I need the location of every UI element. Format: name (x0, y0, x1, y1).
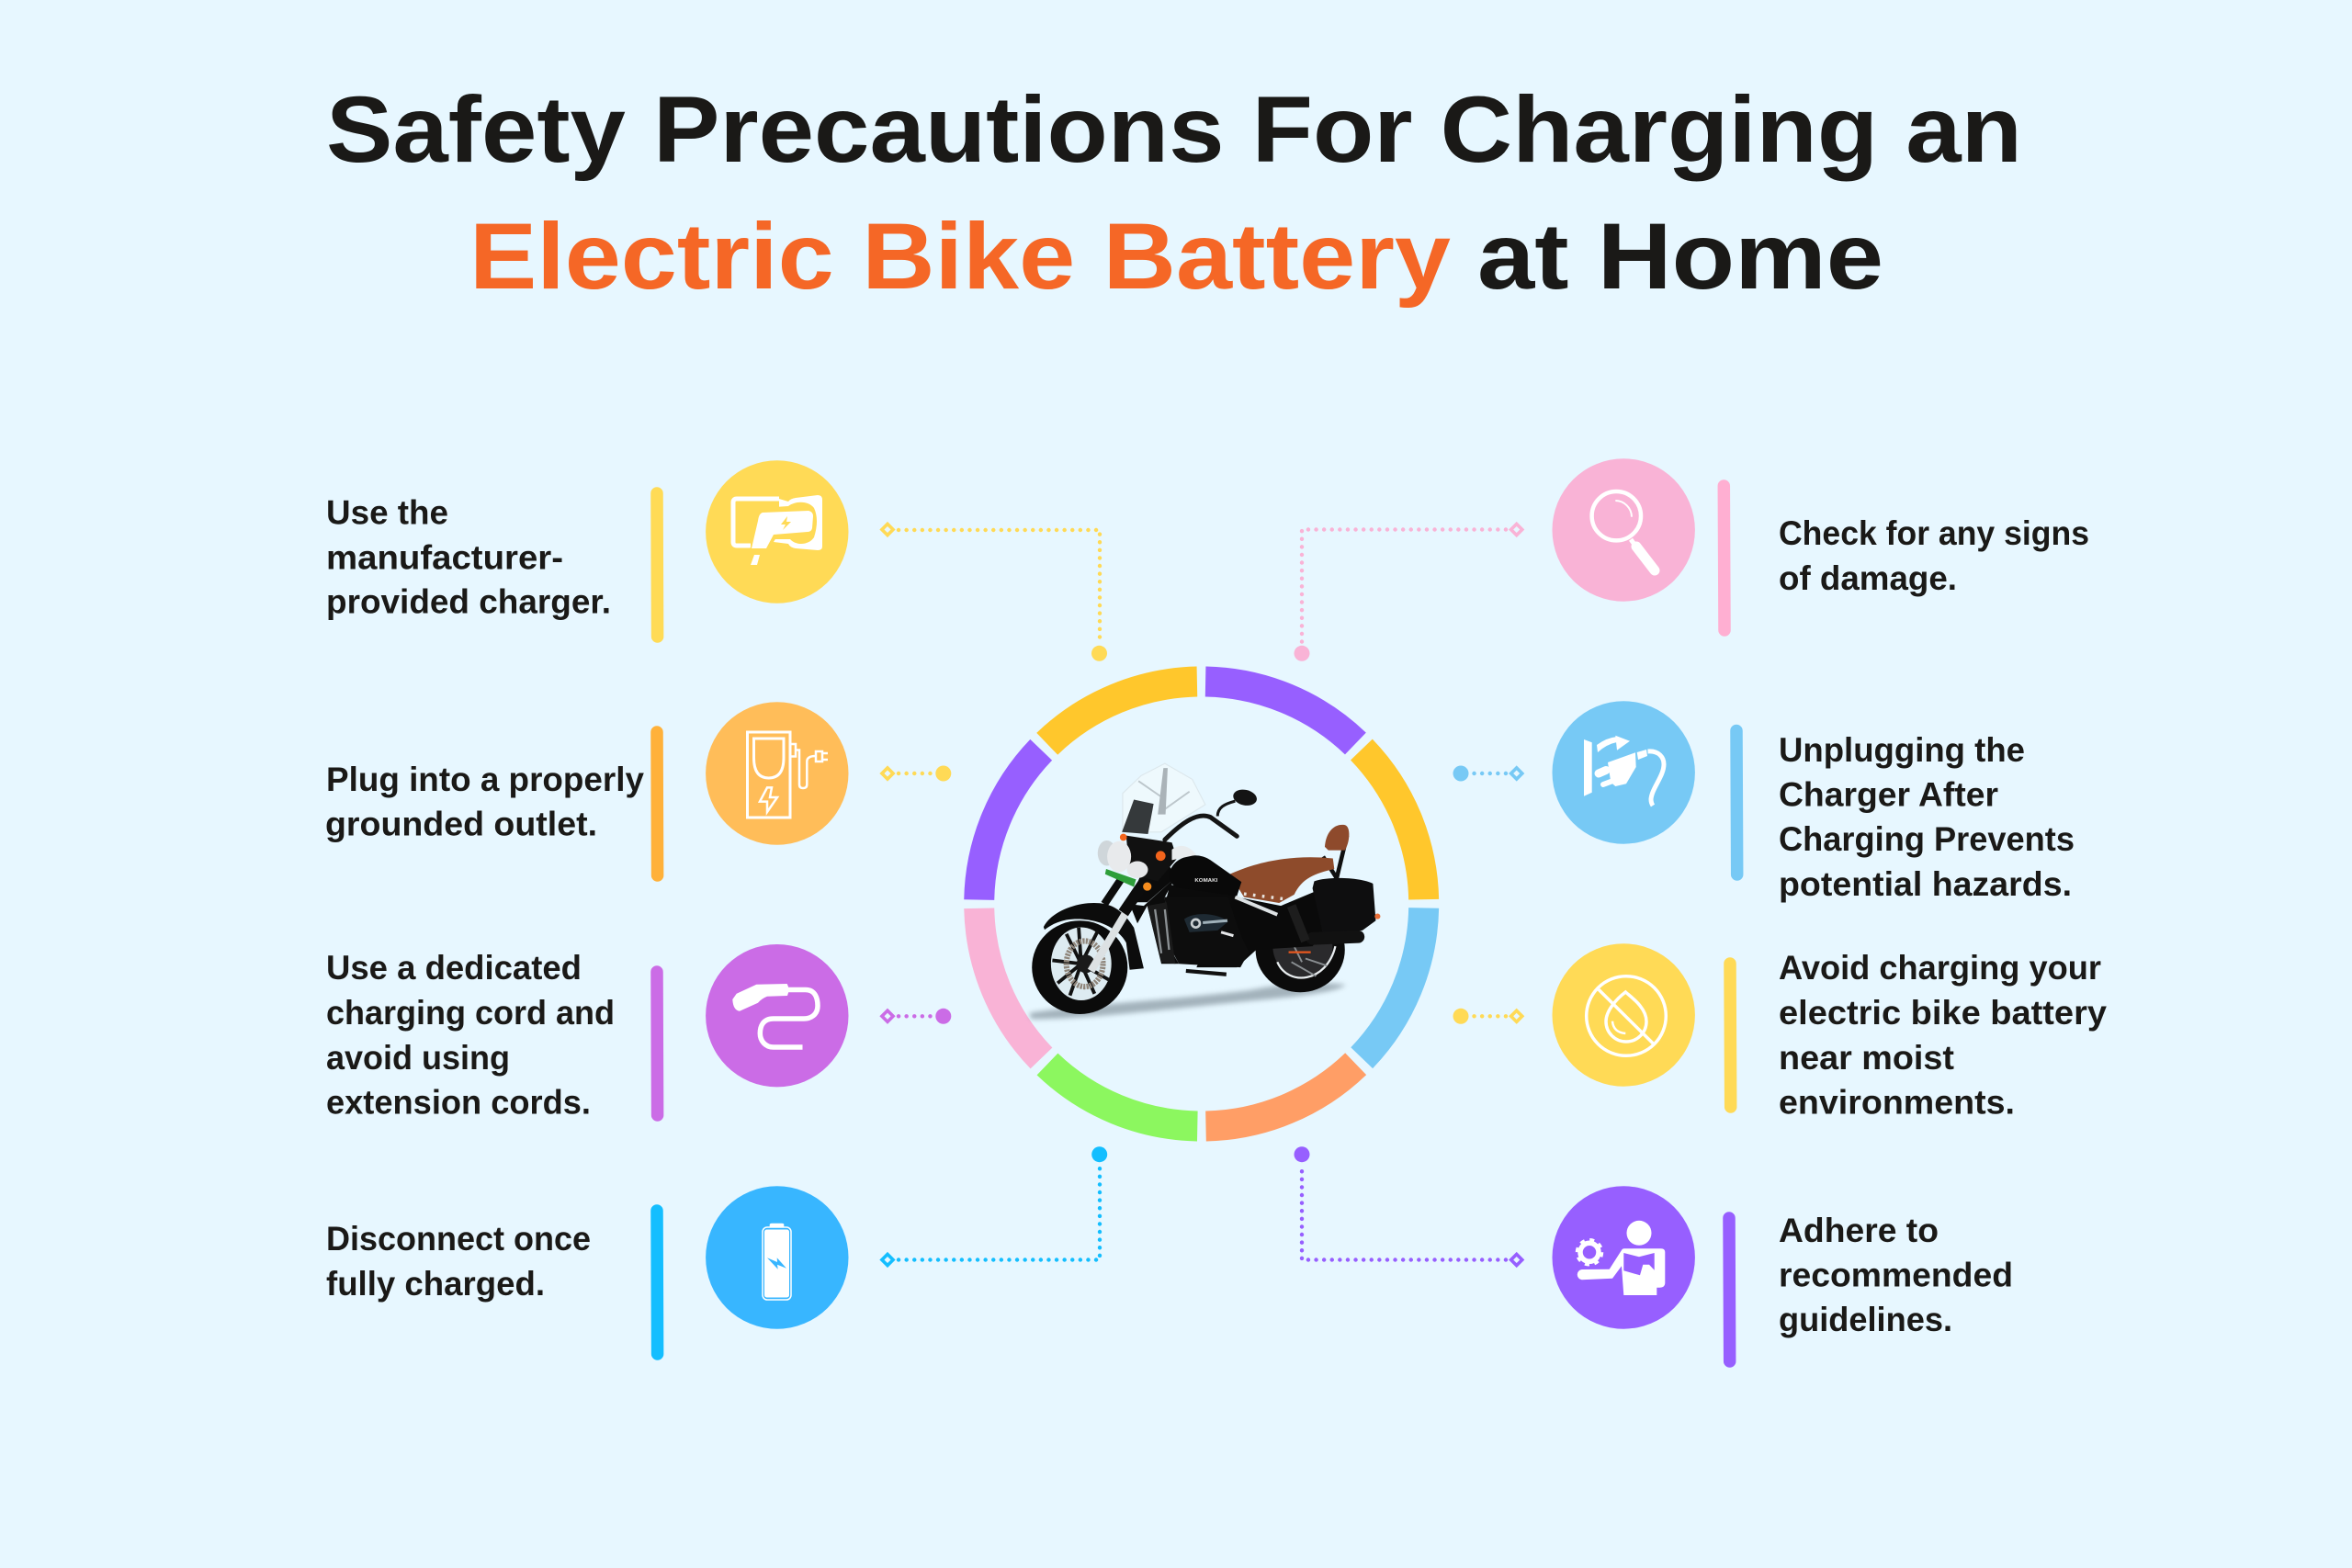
accent bar (650, 1211, 663, 1354)
rear shock (1292, 906, 1306, 941)
text: Avoid charging your (1779, 948, 2101, 987)
connector: violet bottom right (1294, 1146, 1522, 1266)
item: guidelines (1553, 1186, 2013, 1361)
accent bar (1723, 1218, 1736, 1361)
connector: sky right (1453, 766, 1522, 781)
text: near moist (1779, 1038, 1955, 1077)
chrome exhaust strip (1235, 897, 1277, 915)
connector: yellow right (1453, 1009, 1522, 1024)
text: Adhere to (1779, 1211, 1939, 1249)
item: dedicated cord (326, 944, 849, 1121)
icon: charging cable (706, 944, 849, 1087)
text: of damage. (1779, 558, 1957, 597)
icon: magnifier (1553, 458, 1695, 602)
text (1779, 730, 2075, 903)
text: grounded outlet. (325, 805, 597, 843)
accent bar (1724, 964, 1736, 1107)
icon: battery (706, 1186, 849, 1329)
brand text: KOMAKI (1194, 878, 1218, 884)
connector: purple left (882, 1009, 951, 1024)
text: Unplugging the (1779, 730, 2025, 769)
icon: charging station (706, 702, 849, 845)
connector: blue bottom left (882, 1146, 1107, 1266)
icon: charger plug (706, 460, 849, 604)
title line 1: Safety Precautions For Charging an (326, 77, 2022, 182)
text: charging cord and (326, 993, 615, 1032)
text: provided charger. (326, 582, 611, 621)
connector: pink top right (1294, 524, 1522, 661)
mirror (1217, 801, 1235, 817)
orange indicators (1156, 851, 1166, 861)
connector: orange-row yellow (882, 766, 951, 781)
item: unplug (1553, 701, 2075, 903)
central ring (888, 590, 1516, 1218)
text (326, 1219, 591, 1303)
accent bar (650, 732, 663, 875)
accent bar (650, 972, 663, 1115)
icon: person with manual (1553, 1186, 1695, 1329)
text: Use a dedicated (326, 948, 582, 987)
headlight cluster (1126, 836, 1177, 881)
windshield (1123, 763, 1205, 832)
black fork (1124, 867, 1154, 913)
back rest (1325, 825, 1349, 851)
orange rear reflector (1289, 950, 1311, 955)
item: avoid moisture (1553, 943, 2107, 1121)
green plate (1105, 869, 1136, 886)
item: grounded outlet (325, 702, 849, 875)
fuel tank (1170, 855, 1241, 896)
front fender (1044, 903, 1144, 970)
connector: yellow top left (882, 524, 1107, 661)
text (325, 760, 644, 843)
headlights (1098, 840, 1116, 865)
text: potential hazards. (1779, 864, 2072, 903)
text: environments. (1779, 1082, 2015, 1121)
neck and spine mass (1130, 857, 1237, 964)
text: electric bike battery (1779, 993, 2107, 1032)
text: Charger After (1779, 775, 1998, 814)
front wheel (1032, 920, 1127, 1014)
seat studs (1244, 894, 1283, 898)
title line 2 highlight: Electric Bike Battery (469, 204, 1451, 309)
item: disconnect (326, 1186, 849, 1354)
icon: unplugging (1553, 701, 1695, 844)
handlebar (1165, 816, 1237, 840)
display panel (1122, 800, 1154, 834)
motorcycle illustration (1030, 763, 1380, 1019)
text: fully charged. (326, 1264, 545, 1303)
text: Disconnect once (326, 1219, 591, 1258)
saddlebag (1313, 878, 1375, 934)
exhaust (1313, 937, 1358, 939)
text: recommended (1779, 1256, 2013, 1294)
back rest strut (1323, 836, 1347, 879)
title (326, 77, 2022, 309)
silver fork (1091, 911, 1127, 971)
rear wheel (1256, 908, 1345, 992)
icon: no water (1553, 943, 1695, 1087)
rear frame (1196, 892, 1323, 967)
text: Use the (326, 493, 448, 532)
text: Check for any signs (1779, 513, 2089, 552)
text: Charging Prevents (1779, 819, 2075, 858)
item: check damage (1553, 458, 2089, 630)
ground shadow (1030, 983, 1346, 1019)
footrest (1186, 971, 1227, 975)
text (1779, 1211, 2013, 1338)
item: manufacturer charger (326, 460, 849, 637)
accent bar (1718, 486, 1731, 630)
text (326, 493, 611, 621)
text: extension cords. (326, 1082, 591, 1121)
text (1779, 513, 2089, 597)
text: avoid using (326, 1038, 510, 1077)
text (1779, 948, 2107, 1121)
accent bar (1730, 731, 1743, 874)
title line 2 end: at Home (1477, 204, 1883, 309)
motor cover (1165, 897, 1250, 967)
text (326, 948, 615, 1121)
text: Plug into a properly (326, 760, 644, 798)
motor badge (1184, 914, 1228, 932)
seat (1230, 857, 1334, 903)
text: manufacturer- (326, 537, 563, 576)
text: guidelines. (1779, 1300, 1952, 1338)
accent bar (650, 493, 663, 637)
